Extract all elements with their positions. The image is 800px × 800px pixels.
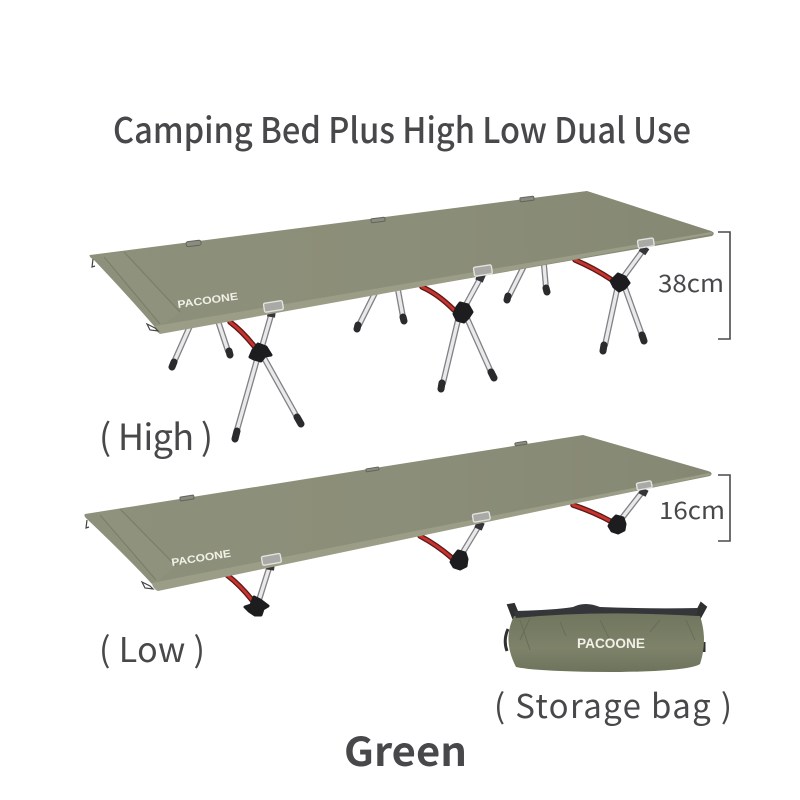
logo: high bed: PACOONE (177, 291, 239, 311)
label: 16cm: 16cm (659, 491, 725, 526)
label: storage bag: ( Storage bag ) (494, 680, 732, 728)
back legs: high bed (172, 265, 547, 367)
bag handles and straps (508, 603, 706, 618)
front legs: high bed (235, 247, 646, 439)
label: 38cm: 38cm (658, 264, 724, 299)
clips: high bed (92, 196, 654, 331)
bracket: 16cm (718, 475, 730, 541)
red support tubes: high bed (230, 260, 612, 346)
bag logo: PACOONE (577, 636, 645, 651)
logo: low bed: PACOONE (171, 548, 232, 569)
pillow band: low (96, 509, 176, 582)
bag body (508, 612, 704, 672)
clips: low bed (86, 441, 652, 589)
bracket: 38cm (718, 232, 730, 339)
red support tubes: low bed (227, 505, 612, 600)
bag zipper (514, 604, 698, 618)
bed front edge: high (155, 232, 713, 334)
pillow band: high (100, 252, 180, 326)
title: Camping Bed Plus High Low Dual Use (113, 103, 691, 154)
label: low: ( Low ) (99, 623, 205, 672)
bed front edge: low (152, 473, 711, 591)
pillow seam: low (100, 509, 176, 580)
bed surface: low (84, 435, 712, 588)
low bed (84, 435, 712, 615)
folded legs: low bed (245, 489, 645, 615)
bed surface: high (90, 191, 714, 331)
high bed (90, 191, 714, 439)
colour name: Green (344, 720, 467, 778)
label: high: ( High ) (99, 409, 213, 461)
pillow seam: high (104, 252, 180, 324)
storage bag (505, 603, 706, 672)
bag side loops (505, 629, 704, 652)
bag wrinkles (520, 618, 695, 650)
